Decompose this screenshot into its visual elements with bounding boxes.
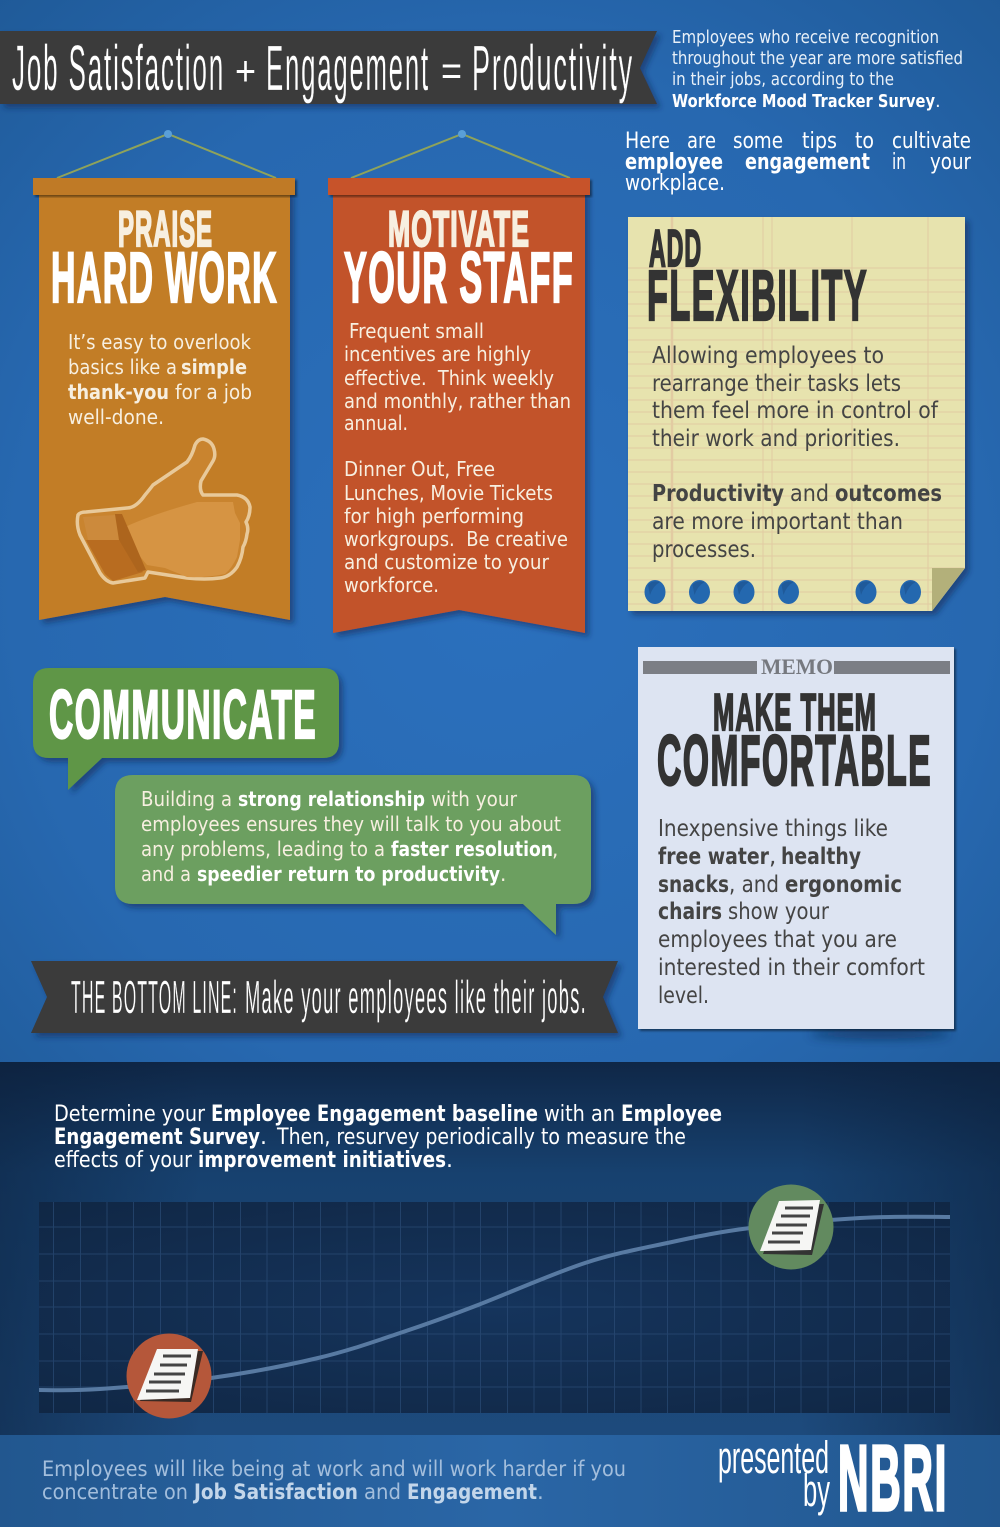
survey text: with an <box>544 1102 615 1127</box>
panel: communicate speech bubbles: COMMUNICATE <box>49 676 317 753</box>
background <box>0 0 1000 1062</box>
intro text: tips: are <box>687 129 716 154</box>
memo text: free water <box>658 844 770 870</box>
banner text: Dinner Out, Free <box>344 457 495 481</box>
intro text: tips: some <box>733 129 783 154</box>
panel: add flexibility note paper <box>628 217 965 611</box>
note text: rearrange their tasks lets <box>652 371 901 397</box>
banner text: effective. Think weekly <box>344 366 554 390</box>
bubble text: any problems, leading to a <box>141 837 385 861</box>
thumb fist <box>123 502 240 577</box>
memo text: show your <box>728 899 829 925</box>
intro text: tips: workplace. <box>625 171 725 196</box>
text bubble <box>115 775 591 935</box>
survey text <box>54 1102 722 1173</box>
memo text: chairs <box>658 899 722 925</box>
footer text <box>42 1457 626 1505</box>
banner text: for high performing <box>344 504 524 528</box>
survey text: Determine your <box>54 1102 206 1127</box>
punched holes <box>644 580 921 604</box>
panel: communicate speech bubbles <box>33 668 591 935</box>
hanging string <box>57 134 276 178</box>
footer text: . <box>537 1480 544 1505</box>
memo paper <box>638 647 954 1029</box>
intro text: tips: your <box>930 150 972 175</box>
footer text: Engagement <box>407 1480 537 1505</box>
banner text <box>344 319 571 597</box>
survey text: Engagement Survey <box>54 1125 260 1150</box>
title: + <box>235 47 256 94</box>
panel: memo make them comfortable <box>638 647 954 1039</box>
thumb cuff <box>83 514 146 581</box>
banner text: workforce. <box>344 573 439 597</box>
banner text: It’s easy to overlook <box>68 330 251 354</box>
survey text: Employee <box>621 1102 722 1127</box>
banner text: basics like a <box>68 355 177 379</box>
intro text: tips: engagement <box>745 150 870 175</box>
banner text: Lunches, Movie Tickets <box>344 481 553 505</box>
marker: follow-up survey <box>748 1184 834 1270</box>
title: = <box>441 47 462 94</box>
bottom line text: THE BOTTOM LINE: <box>71 971 238 1023</box>
banner text: and customize to your <box>344 550 550 574</box>
memo label: MEMO <box>761 654 833 679</box>
bubble text <box>141 787 561 886</box>
trend curve <box>39 1217 950 1390</box>
panel: praise hard work banner <box>33 130 295 620</box>
banner body <box>39 190 290 620</box>
banner text: thank-you <box>68 380 169 404</box>
grid <box>39 1202 950 1413</box>
intro text: recognition: . <box>935 91 941 112</box>
hanging string <box>351 134 570 178</box>
marker: start survey <box>126 1334 212 1418</box>
heading: motivate: MOTIVATE <box>388 201 530 257</box>
banner text <box>68 330 252 429</box>
paper <box>628 217 965 611</box>
banner body <box>333 190 585 633</box>
bottom line ribbon <box>31 961 618 1033</box>
note text: Allowing employees to <box>652 343 884 369</box>
presented by: presented <box>718 1432 829 1483</box>
memo text: interested in their comfort <box>658 955 925 981</box>
note text: their work and priorities. <box>652 426 900 452</box>
intro text: tips <box>625 129 972 196</box>
presented by <box>718 1432 830 1516</box>
memo text: snacks <box>658 872 729 898</box>
memo text: employees that you are <box>658 927 897 953</box>
footer text: concentrate on <box>42 1480 188 1505</box>
bubble text: with your <box>431 787 518 811</box>
intro text: tips: employee <box>625 150 723 175</box>
text: Productivity <box>472 32 634 104</box>
survey text: Employee Engagement baseline <box>211 1102 538 1127</box>
intro text: tips: Here <box>625 129 670 154</box>
footer text: Employees will like being at work and will work harder if you <box>42 1457 626 1482</box>
communicate bubble <box>33 668 339 790</box>
survey text: Then, resurvey periodically to measure the <box>276 1125 686 1150</box>
title: Engagement <box>266 32 430 104</box>
banner text: annual. <box>344 411 408 435</box>
footer text: and <box>364 1480 401 1505</box>
memo shadow <box>810 1029 950 1039</box>
bubble text: speedier return to productivity <box>197 862 500 886</box>
survey text: . <box>260 1125 267 1150</box>
memo text: level. <box>658 983 709 1009</box>
ruled lines <box>628 217 965 611</box>
memo text: healthy <box>781 844 861 870</box>
memo text: Inexpensive things like <box>658 816 888 842</box>
intro text: tips: in <box>892 150 906 175</box>
panel: footer <box>0 1426 1000 1527</box>
note text <box>652 343 942 563</box>
note text: are more important than <box>652 509 903 535</box>
memo text <box>658 816 925 1009</box>
intro text: tips: cultivate <box>892 129 971 154</box>
bubble text: strong relationship <box>238 787 425 811</box>
panel: praise hard work banner: PRAISE <box>118 201 213 257</box>
survey text: . <box>446 1148 453 1173</box>
banner text: incentives are highly <box>344 342 531 366</box>
title: Job Satisfaction <box>12 32 225 104</box>
memo text: , <box>769 844 776 870</box>
memo text: , and <box>729 872 779 898</box>
line chart <box>39 1184 950 1418</box>
survey text: effects of your <box>54 1148 193 1173</box>
intro text: recognition: in their jobs, according to the <box>672 69 894 90</box>
note text: Productivity <box>652 481 784 507</box>
note text: outcomes <box>835 481 942 507</box>
banner text: and monthly, rather than <box>344 389 571 413</box>
bubble text: Building a <box>141 787 232 811</box>
bubble text: , <box>552 837 558 861</box>
page fold <box>932 568 965 611</box>
panel: praise hard work banner: HARD WORK <box>51 239 278 318</box>
bubble text: and a <box>141 862 191 886</box>
memo bars <box>643 661 757 674</box>
bubble text: . <box>500 862 506 886</box>
memo text: ergonomic <box>785 872 902 898</box>
banner text: workgroups. Be creative <box>344 527 568 551</box>
intro text: recognition: Workforce Mood Tracker Survey <box>672 91 935 112</box>
banner text: well-done. <box>68 405 164 429</box>
panel: add flexibility note paper: ADD <box>649 220 702 278</box>
intro text: recognition <box>672 27 963 112</box>
survey text: improvement initiatives <box>198 1148 446 1173</box>
note text: them feel more in control of <box>652 398 939 424</box>
panel: engagement survey section <box>0 1062 1000 1435</box>
banner text: simple <box>181 355 247 379</box>
banner text: for a job <box>175 380 252 404</box>
bubble text: employees ensures they will talk to you about <box>141 812 561 836</box>
panel: motivate your staff banner <box>328 130 590 633</box>
intro text: recognition: Employees who receive recognition <box>672 27 939 48</box>
title ribbon <box>0 31 657 104</box>
footer text: Job Satisfaction <box>192 1480 358 1505</box>
bubble text: faster resolution <box>391 837 553 861</box>
intro text: tips: to <box>855 129 874 154</box>
note text: and <box>790 481 829 507</box>
presented by: by <box>803 1465 830 1516</box>
intro text: tips: tips <box>802 129 837 154</box>
note text: processes. <box>652 537 756 563</box>
panel: motivate your staff banner: YOUR STAFF <box>344 239 574 318</box>
banner text: Frequent small <box>349 319 484 343</box>
icon: thumbs up <box>77 439 250 583</box>
